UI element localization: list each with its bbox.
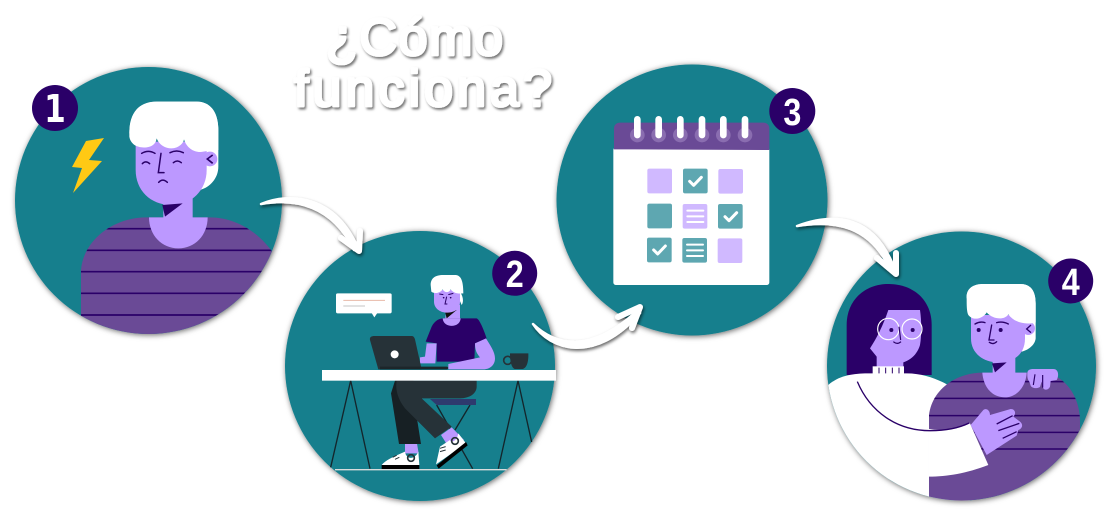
caption: step 3: online <box>662 377 718 398</box>
caption: step 1: apoyo emocional <box>62 401 234 424</box>
circle background 3 <box>556 64 828 336</box>
title: funciona? <box>294 60 552 118</box>
circle background 1 <box>15 67 282 334</box>
icon: lightning bolt <box>72 138 104 193</box>
panel: step 3 calendar <box>556 64 828 336</box>
arrow: step 2 to 3 <box>533 307 640 348</box>
title <box>294 9 552 118</box>
caption: step 4: ¡Listo! <box>934 94 992 115</box>
person illustration 1 <box>67 102 293 337</box>
icon: calendar <box>613 116 769 285</box>
caption: step 2 <box>360 145 480 190</box>
caption: step 1: Paciente con <box>83 357 213 380</box>
badge 4 <box>1048 258 1093 304</box>
badge 4: 4 <box>1062 262 1080 304</box>
badge 1 <box>32 85 78 132</box>
title: ¿Cómo <box>326 9 503 67</box>
badge 2 <box>492 251 537 296</box>
caption: step 4: Tu psicólogo te atenderá <box>851 116 1075 137</box>
desk scene illustration <box>322 275 556 470</box>
circle background 4 <box>827 232 1096 500</box>
people illustration <box>820 284 1087 502</box>
badge 1: 1 <box>44 88 66 132</box>
panel: step 1 person with headache <box>15 67 293 337</box>
badge 3: 3 <box>783 92 801 134</box>
arrow: step 3 to 4 <box>797 219 896 274</box>
badge 2: 2 <box>506 254 524 296</box>
caption: step 3: Reserva tu cita <box>622 356 758 377</box>
caption: step 2: Visita <box>394 145 447 167</box>
panel: step 2 person at laptop <box>285 231 556 501</box>
caption: step 4: de manera virtual <box>884 182 1042 203</box>
panel: step 4 psychologist and patient <box>820 232 1096 502</box>
badge 3 <box>769 88 815 134</box>
caption: step 3 <box>622 356 758 398</box>
caption: step 2: nuestra Web <box>360 168 480 190</box>
caption: step 4: de forma personalizada <box>857 139 1070 160</box>
circle background 2 <box>285 231 555 501</box>
arrow: step 1 to 2 <box>261 198 360 251</box>
caption: step 1: necesidad de <box>81 379 215 402</box>
caption: step 4 <box>851 94 1075 203</box>
caption: step 1 <box>62 357 234 424</box>
caption: step 4: en cada sesión <box>895 161 1031 182</box>
